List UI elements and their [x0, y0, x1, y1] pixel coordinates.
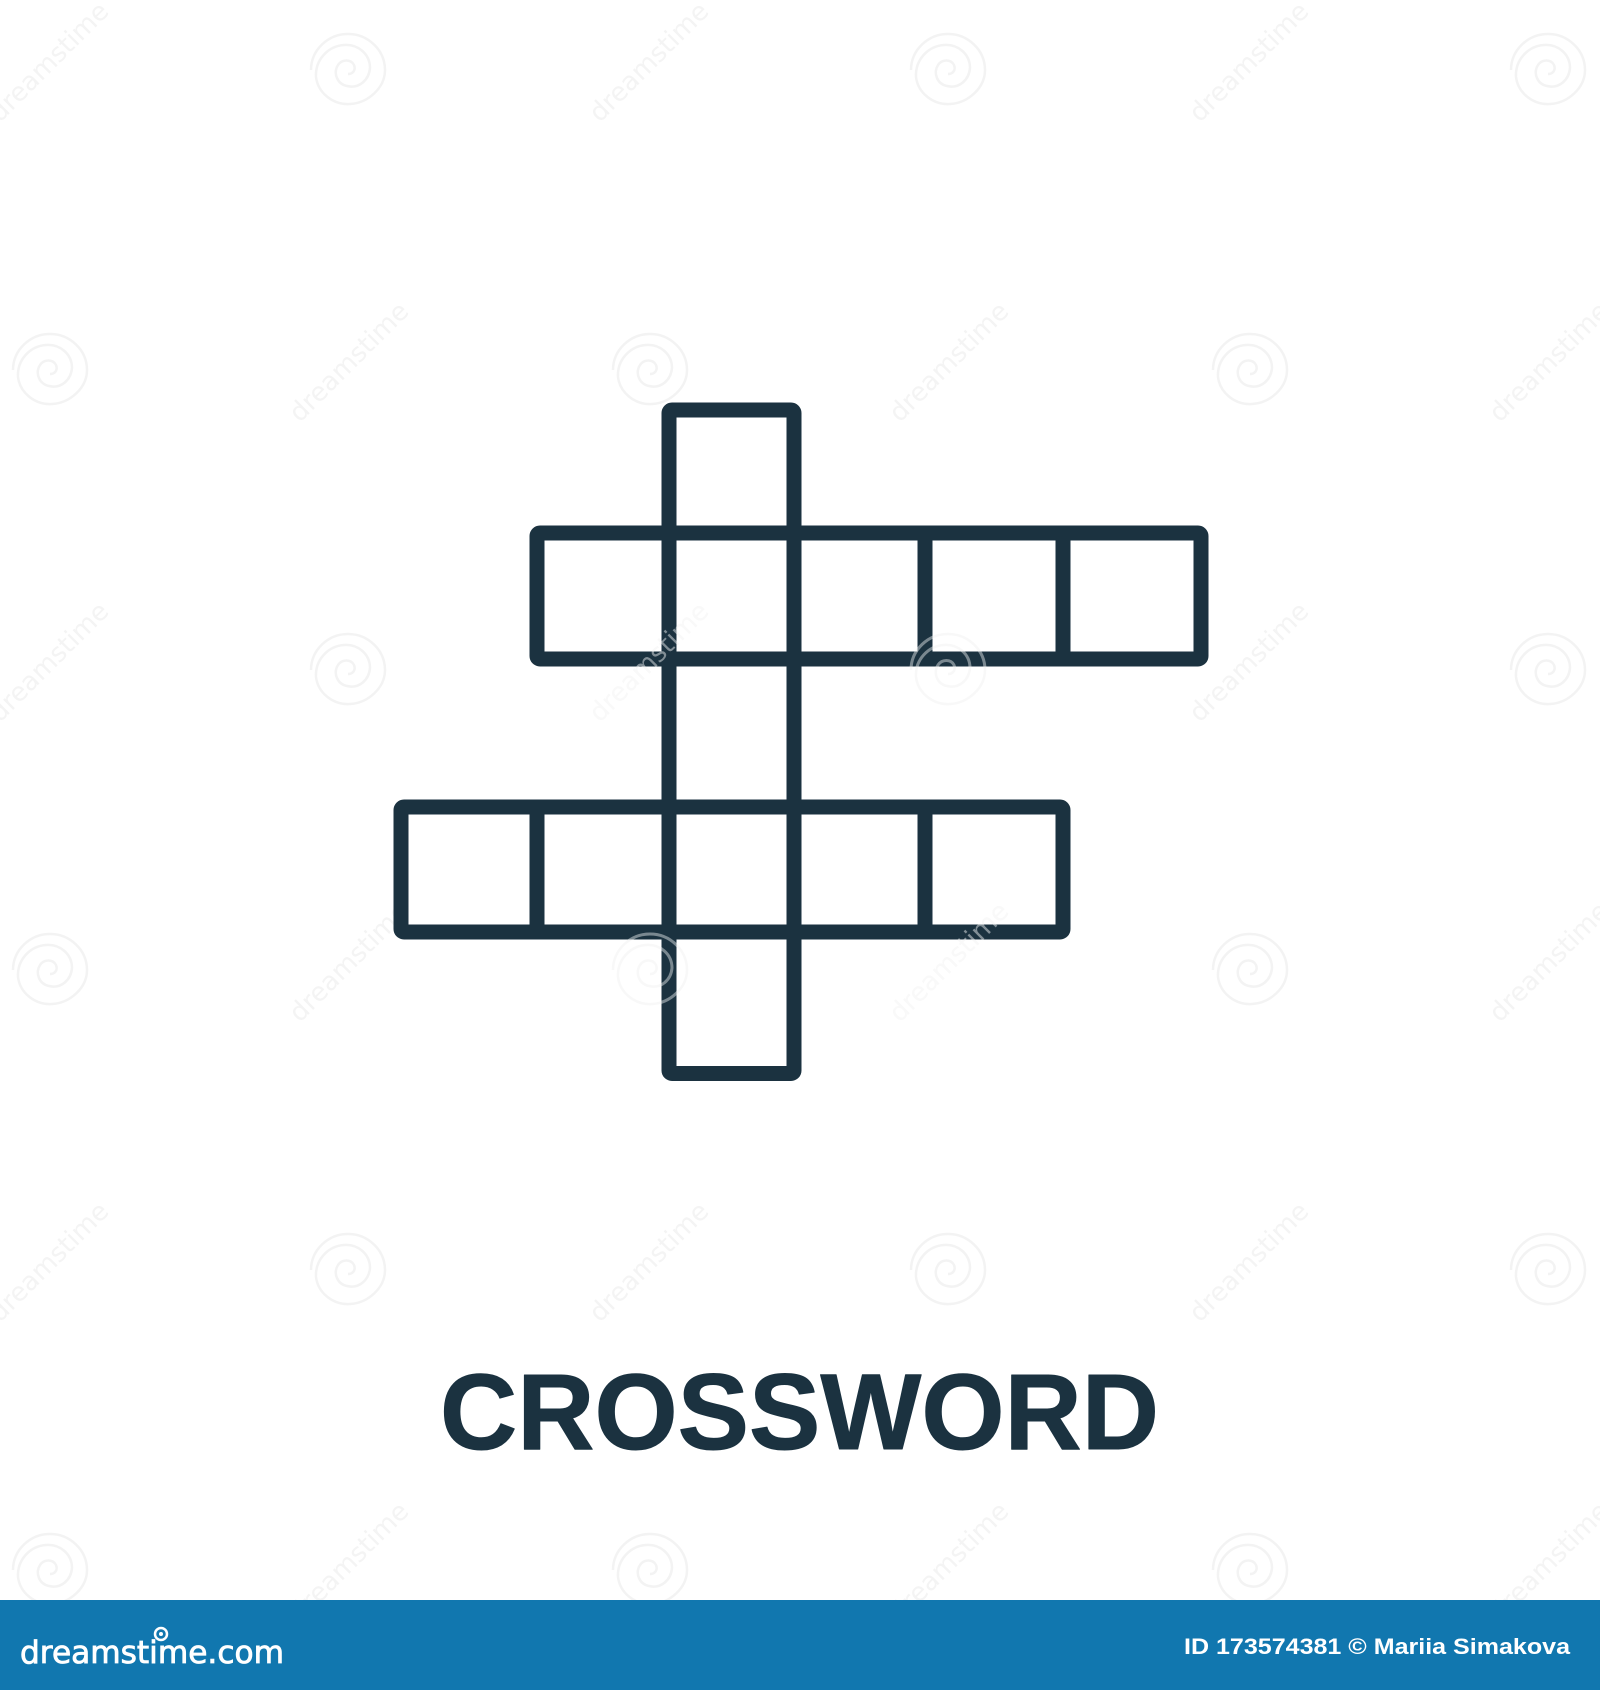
background watermark pattern: dreamstime: [1184, 0, 1315, 128]
background watermark pattern: dreamstime: [284, 1497, 415, 1628]
background watermark pattern: dreamstime: [284, 897, 415, 1028]
background watermark pattern: dreamstime: [884, 1497, 1015, 1628]
image credit: ID 173574381 © Mariia Simakova: [1184, 1634, 1571, 1659]
background watermark pattern: dreamstime: [284, 297, 415, 428]
background watermark pattern: dreamstime: [1184, 597, 1315, 728]
watermark overlay on grid: [584, 597, 1015, 1028]
background watermark pattern: dreamstime: [584, 1197, 715, 1328]
icon: crossword grid: [401, 410, 1201, 1074]
footer banner: [0, 1600, 1600, 1690]
title: CROSSWORD: [440, 1351, 1159, 1472]
background watermark pattern: dreamstime: [884, 897, 1015, 1028]
background watermark pattern: dreamstime: [584, 0, 715, 128]
logo: dreamstime.com: dreamstime.com: [20, 1635, 284, 1671]
background watermark pattern: dreamstime: [1184, 1197, 1315, 1328]
background watermark pattern: dreamstime: [884, 297, 1015, 428]
watermark overlay on grid: dreamstime: [884, 897, 1015, 1028]
background watermark pattern: dreamstime: [584, 597, 715, 728]
watermark overlay on grid: dreamstime: [584, 597, 715, 728]
